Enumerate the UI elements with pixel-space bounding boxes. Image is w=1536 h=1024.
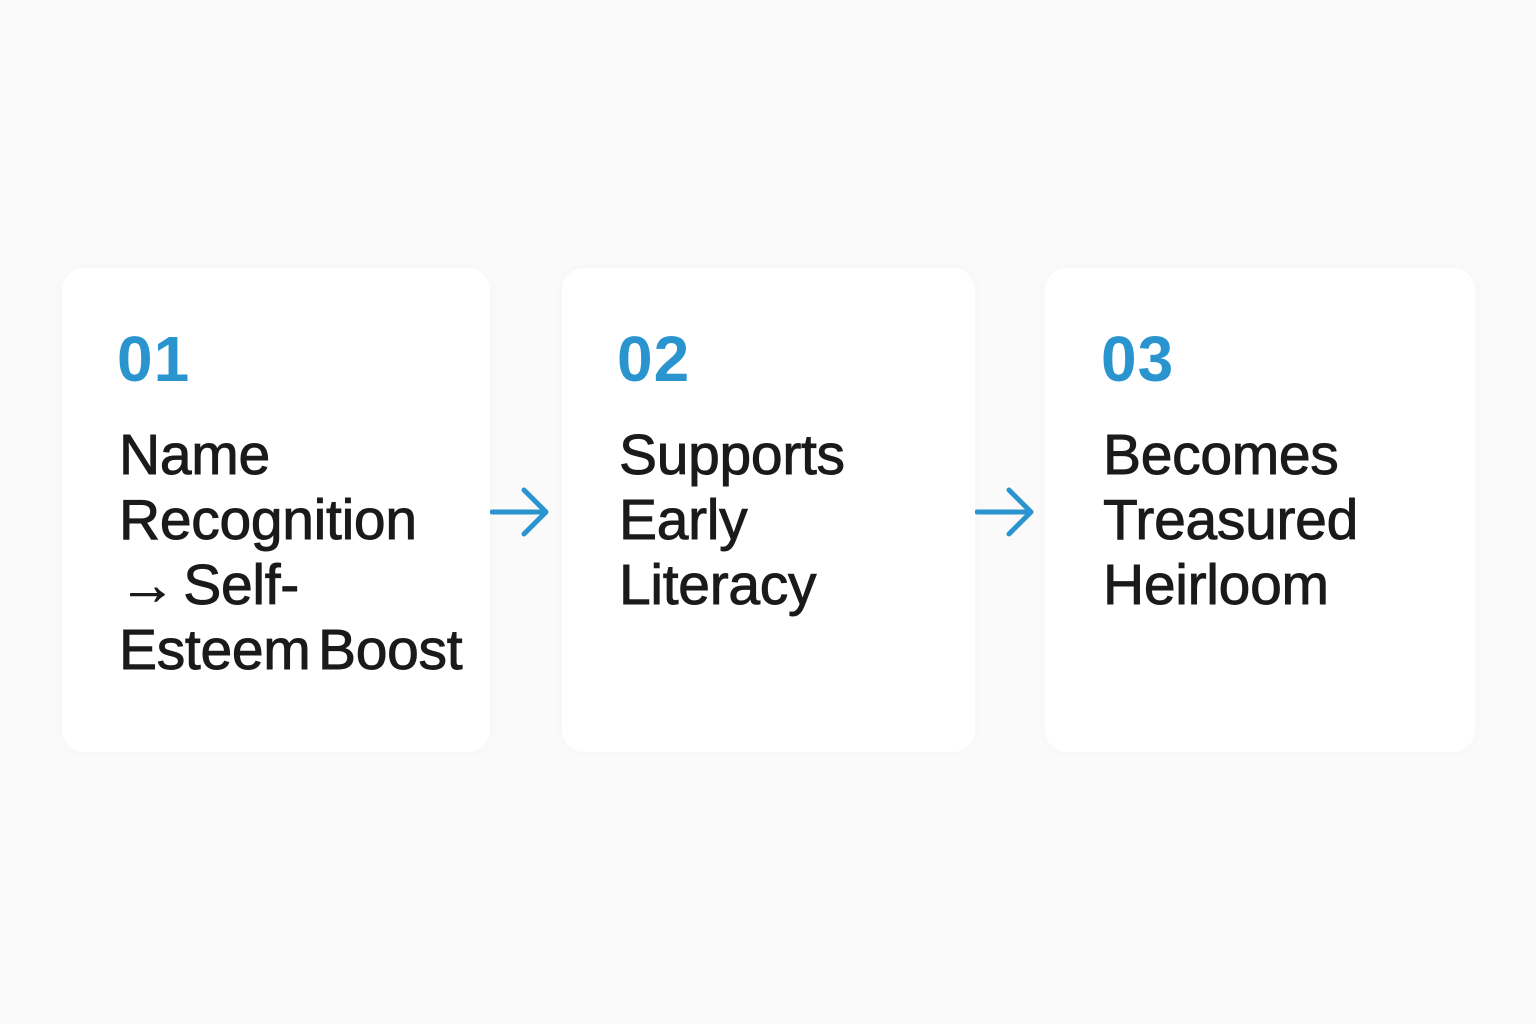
text 1: → Self-	[119, 553, 299, 617]
text 3	[1103, 423, 1358, 617]
text 1: Recognition	[119, 488, 417, 552]
number 02: 02	[617, 323, 690, 395]
text 2: Early	[619, 488, 747, 552]
text 2: Literacy	[619, 553, 816, 617]
number 01: 01	[117, 323, 190, 395]
text 3: Heirloom	[1103, 553, 1329, 617]
text 3: Becomes	[1103, 423, 1339, 487]
text 2: Supports	[619, 423, 845, 487]
arrow 2	[975, 488, 1034, 536]
arrow 1	[490, 488, 548, 536]
text 1: Name	[119, 423, 270, 487]
text 2	[619, 423, 845, 617]
card 3	[1045, 268, 1475, 752]
text 1: Esteem Boost	[119, 618, 462, 682]
text 1	[119, 423, 463, 682]
card 1	[62, 268, 490, 752]
card 2	[562, 268, 975, 752]
number 03: 03	[1101, 323, 1174, 395]
text 3: Treasured	[1103, 488, 1358, 552]
